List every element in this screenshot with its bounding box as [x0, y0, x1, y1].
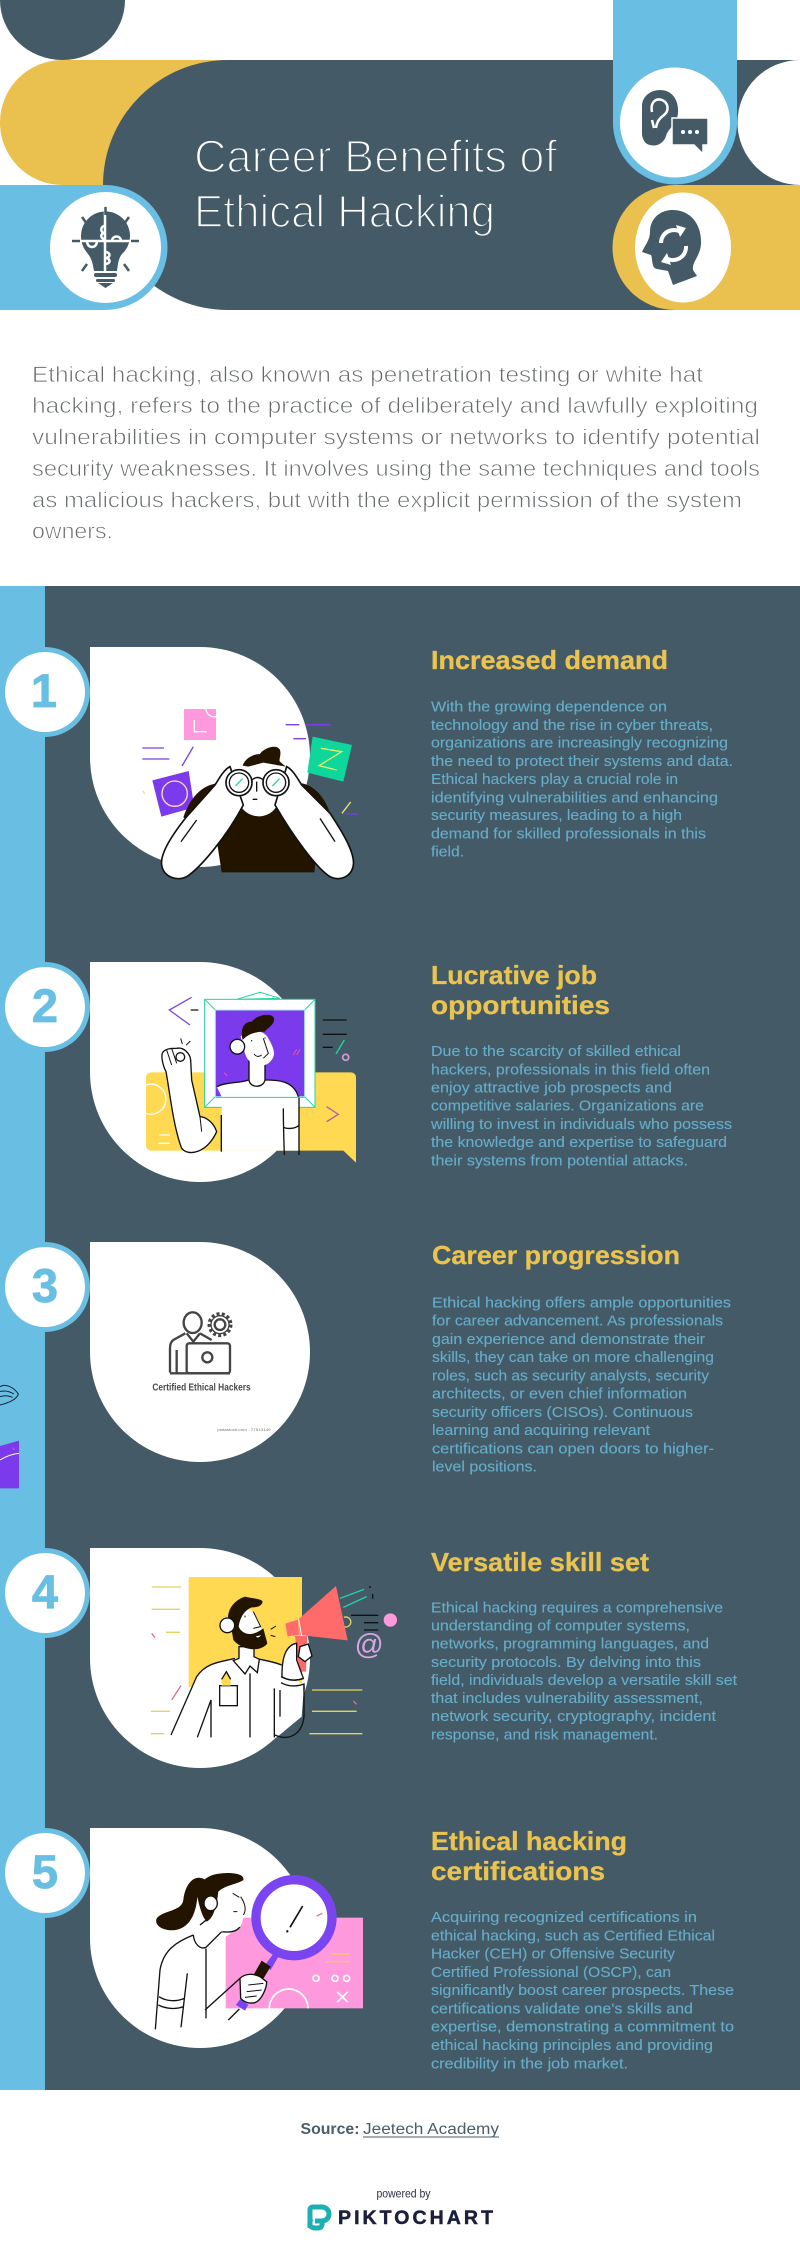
heading — [431, 960, 610, 1020]
header banner — [0, 0, 800, 310]
body text — [431, 1909, 734, 2072]
body text: expertise, demonstrating a commitment to — [431, 2018, 734, 2036]
icon: head with arrows — [635, 192, 731, 302]
illustration: man with megaphone — [151, 1577, 397, 1737]
teardrop — [90, 1828, 310, 2048]
dark main banner — [103, 60, 800, 310]
yellow right pill — [612, 185, 800, 310]
illustration fragment on side bar — [0, 1385, 19, 1488]
intro paragraph: Ethical hacking, also known as penetration testing or white hat — [32, 362, 703, 387]
body text: ethical hacking, such as Certified Ethical — [431, 1927, 715, 1944]
number badge 4: 4 — [32, 1565, 58, 1618]
blue top-right tab — [613, 0, 737, 184]
heading — [431, 1826, 627, 1886]
panel: benefit 1 — [0, 645, 733, 879]
panel: benefits background — [0, 586, 800, 2090]
body text: learning and acquiring relevant — [432, 1422, 651, 1439]
panel: benefit 5 — [0, 1826, 734, 2072]
number badge 4 — [0, 1548, 90, 1638]
body text: that includes vulnerability assessment, — [431, 1690, 703, 1707]
body text — [431, 1599, 738, 1743]
body text: certifications validate one's skills and — [431, 2000, 693, 2017]
number badge 5: 5 — [32, 1845, 58, 1898]
heading: opportunities — [431, 990, 610, 1020]
body text: Ethical hackers play a crucial role in — [431, 771, 678, 788]
body text: With the growing dependence on — [431, 699, 667, 716]
body text: identifying vulnerabilities and enhancing — [431, 789, 718, 806]
powered by Piktochart logo — [310, 2186, 493, 2229]
body text: hackers, professionals in this field often — [431, 1061, 710, 1078]
body text: skills, they can take on more challenging — [432, 1349, 714, 1366]
body text: level positions. — [432, 1459, 537, 1476]
body text — [430, 1043, 732, 1170]
blue left pill — [0, 185, 168, 310]
heading: Versatile skill set — [431, 1547, 649, 1577]
panel: benefit 4 — [0, 1547, 738, 1768]
right white half circle — [738, 60, 800, 185]
teardrop — [90, 647, 310, 867]
body text: gain experience and demonstrate their — [432, 1331, 705, 1348]
number badge 2 — [0, 962, 90, 1052]
title: Ethical Hacking — [194, 186, 495, 237]
body text: Certified Professional (OSCP), can — [431, 1964, 671, 1981]
yellow left pill — [0, 60, 225, 185]
body text: understanding of computer systems, — [431, 1618, 690, 1634]
body text: technology and the rise in cyber threats, — [431, 717, 713, 734]
powered by Piktochart logo: powered by — [376, 2186, 430, 2200]
body text: their systems from potential attacks. — [431, 1152, 688, 1170]
illustration: person with binoculars — [142, 709, 358, 879]
panel: benefit 3 — [0, 1240, 731, 1488]
intro paragraph: as malicious hackers, but with the explicit permission of the system — [32, 488, 742, 512]
body text: competitive salaries. Organizations are — [431, 1098, 704, 1115]
heading: Ethical hacking — [431, 1826, 627, 1856]
body text: the knowledge and expertise to safeguard — [431, 1134, 727, 1151]
body text: network security, cryptography, incident — [431, 1708, 717, 1725]
body text: significantly boost career prospects. These — [431, 1982, 734, 1999]
illustration: man with megaphone: @ — [355, 1629, 384, 1661]
intro paragraph: vulnerabilities in computer systems or networks to identify potential — [32, 424, 760, 450]
title — [194, 131, 557, 237]
body text: networks, programming languages, and — [431, 1636, 709, 1653]
heading: certifications — [431, 1856, 605, 1886]
body text: demand for skilled professionals in this — [431, 825, 706, 842]
teardrop — [90, 1548, 310, 1768]
source line: Jeetech Academy — [363, 2121, 499, 2138]
illustration: certified ethical hacker icon: pixtastock.com - 77513149 — [217, 1427, 272, 1432]
illustration: person in picture frame — [146, 992, 356, 1163]
body text: ethical hacking principles and providing — [431, 2037, 713, 2054]
body text: roles, such as security analysts, security — [432, 1367, 710, 1384]
body text: organizations are increasingly recognizing — [431, 734, 728, 752]
body text: Hacker (CEH) or Offensive Security — [431, 1946, 676, 1962]
body text: enjoy attractive job prospects and — [431, 1080, 672, 1096]
teardrop — [90, 962, 310, 1182]
source line: Source: — [300, 2121, 360, 2138]
number badge 1 — [0, 647, 90, 737]
title: Career Benefits of — [194, 131, 557, 182]
number badge 3 — [0, 1242, 90, 1332]
body text: Ethical hacking requires a comprehensive — [431, 1599, 723, 1616]
body text: Acquiring recognized certifications in — [431, 1909, 697, 1926]
body text — [432, 1294, 731, 1476]
body text: field. — [431, 844, 464, 861]
body text: the need to protect their systems and data. — [431, 753, 733, 770]
intro paragraph — [32, 362, 760, 544]
body text: security protocols. By delving into this — [431, 1654, 701, 1671]
number badge 2: 2 — [32, 979, 58, 1032]
powered by Piktochart logo: PIKTOCHART — [338, 2207, 493, 2229]
body text: field, individuals develop a versatile skill set — [431, 1672, 738, 1689]
body text: certifications can open doors to higher- — [432, 1440, 714, 1457]
panel: benefit 2 — [0, 960, 732, 1182]
intro paragraph: owners. — [32, 518, 113, 544]
body text: Due to the scarcity of skilled ethical — [431, 1043, 681, 1060]
body text: architects, or even chief information — [432, 1386, 687, 1402]
teardrop — [90, 1242, 310, 1462]
body text: response, and risk management. — [431, 1726, 658, 1743]
body text — [431, 699, 733, 861]
heading: Lucrative job — [431, 960, 597, 990]
body text: security measures, leading to a high — [431, 807, 682, 824]
body text: willing to invest in individuals who possess — [430, 1116, 732, 1133]
intro paragraph: security weaknesses. It involves using the same techniques and tools — [32, 456, 760, 481]
body text: Ethical hacking offers ample opportunities — [432, 1294, 731, 1311]
number badge 1: 1 — [31, 664, 57, 717]
illustration: certified ethical hacker icon: Certified Ethical Hackers — [152, 1383, 251, 1394]
number badge 5 — [0, 1828, 90, 1918]
number badge 3: 3 — [32, 1259, 58, 1312]
icon: lightbulb puzzle — [50, 192, 161, 303]
icon: Piktochart mark — [310, 2207, 329, 2228]
heading: Career progression — [432, 1240, 680, 1270]
illustration: certified ethical hacker icon — [152, 1312, 272, 1432]
body text: for career advancement. As professionals — [432, 1312, 723, 1330]
intro paragraph: hacking, refers to the practice of deliberately and lawfully exploiting — [32, 393, 758, 418]
top-left half circle — [0, 0, 125, 60]
source line — [300, 2121, 499, 2138]
heading: Increased demand — [431, 645, 668, 675]
illustration: woman with magnifying glass — [155, 1873, 363, 2029]
body text: security officers (CISOs). Continuous — [432, 1404, 693, 1421]
icon: ear and speech bubble — [620, 68, 730, 178]
body text: credibility in the job market. — [431, 2055, 628, 2072]
